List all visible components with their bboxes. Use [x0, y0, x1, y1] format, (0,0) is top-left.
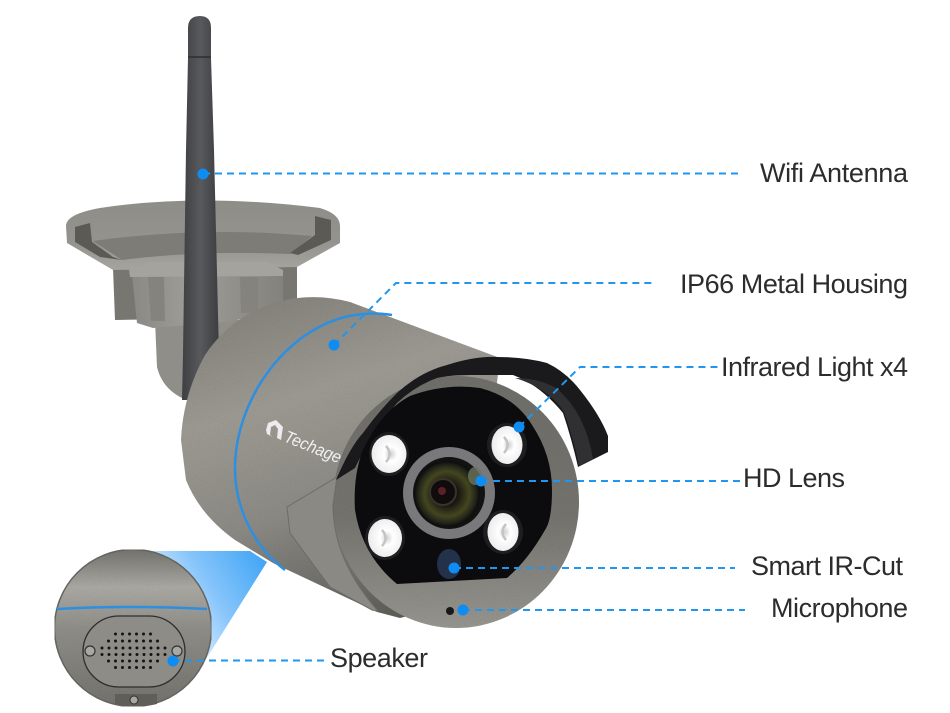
left screw — [85, 646, 95, 656]
microphone hole — [446, 607, 454, 615]
blue ring — [235, 314, 392, 570]
LED bottom left — [365, 516, 405, 560]
housing cylinder — [181, 297, 500, 618]
collar ribs — [148, 277, 258, 321]
callout: smart ir-cut — [448, 551, 903, 581]
inset blue ring — [57, 607, 207, 609]
plate underside — [93, 232, 312, 260]
mounting bracket — [66, 200, 340, 398]
mount screw — [130, 696, 138, 704]
LED bottom right — [483, 510, 523, 554]
callout: microphone: Microphone — [771, 593, 908, 623]
speaker inset — [54, 550, 212, 706]
logo icon — [266, 420, 283, 440]
callout: speaker — [168, 643, 428, 673]
plate slots — [75, 216, 331, 260]
bottom mount — [115, 694, 157, 706]
callout: wifi antenna: Wifi Antenna — [760, 158, 909, 188]
logo text: Techage — [282, 427, 344, 467]
callout: wifi antenna — [198, 158, 909, 188]
brand logo — [266, 420, 344, 467]
callout: microphone — [458, 593, 908, 623]
zoom wedge — [150, 551, 267, 680]
callout: infrared light: Infrared Light x4 — [721, 352, 908, 382]
lens — [403, 447, 495, 539]
antenna — [182, 16, 219, 400]
callout: smart ir-cut: Smart IR-Cut — [751, 551, 903, 581]
black front panel — [355, 387, 552, 584]
callout: speaker: Speaker — [330, 643, 428, 673]
right screw — [172, 646, 182, 656]
visor inner shade — [515, 378, 593, 466]
sun visor — [336, 357, 608, 480]
speaker grille — [102, 634, 166, 668]
ball joint neck — [155, 320, 240, 398]
LED top left — [369, 432, 409, 476]
collar flange — [129, 262, 283, 277]
callout: hd lens — [476, 463, 845, 493]
callout: infrared light — [514, 352, 908, 432]
threaded collar — [132, 275, 283, 328]
rear collar — [113, 266, 297, 320]
IR LEDs — [365, 423, 527, 560]
callout: metal housing: IP66 Metal Housing — [680, 269, 908, 299]
speaker plate — [83, 616, 185, 687]
callout: metal housing — [328, 269, 908, 350]
IR-cut sensor — [437, 549, 461, 579]
front face — [333, 376, 579, 628]
lower shroud — [287, 477, 378, 611]
camera body — [181, 297, 608, 628]
inset disc — [54, 550, 212, 706]
callout: hd lens: HD Lens — [743, 463, 845, 493]
LED top right — [487, 423, 527, 467]
wall plate — [66, 200, 340, 270]
